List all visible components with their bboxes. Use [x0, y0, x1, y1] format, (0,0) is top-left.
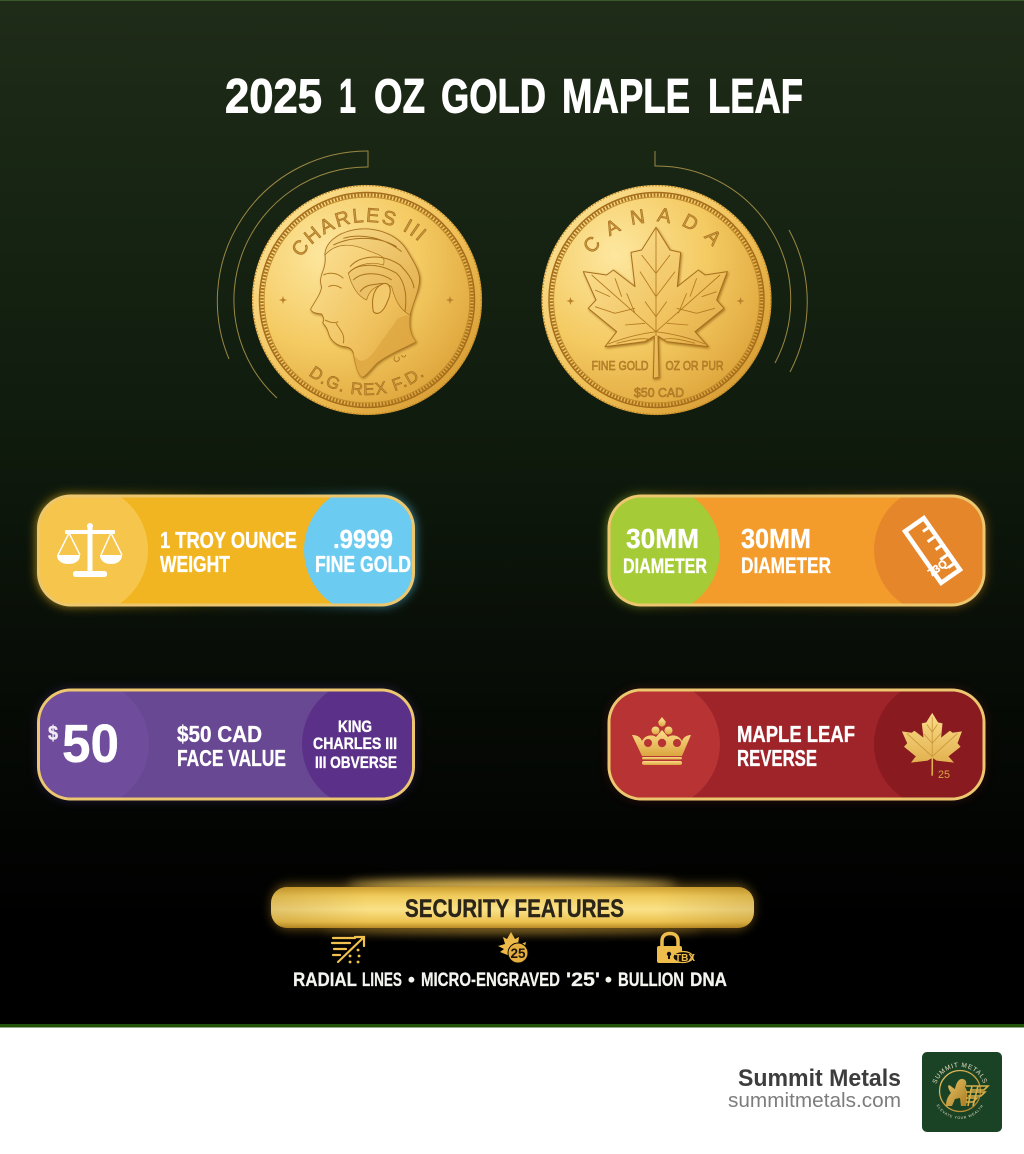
stars [566, 297, 744, 305]
brand name: Summit Metals [738, 1065, 901, 1092]
label: 30mm diameter: 30MM [741, 523, 811, 554]
maple leaf [583, 227, 727, 378]
badge: king charles iii obverse: III OBVERSE [315, 753, 397, 772]
portrait [311, 229, 419, 377]
footer [0, 1024, 1024, 1132]
website: summitmetals.com [728, 1090, 901, 1112]
security features list: DNA [690, 969, 727, 991]
legend: OZ OR PUR: OZ OR PUR [666, 358, 724, 373]
pill: weight [18, 485, 434, 615]
pill: face value [32, 684, 420, 806]
label: maple leaf reverse: MAPLE LEAF [737, 721, 855, 747]
badge: 30mm diameter: 30MM [626, 523, 699, 554]
coin: reverse Maple Leaf [541, 184, 772, 416]
legend: D.G. REX F.D.: D.G. REX F.D. [309, 366, 424, 396]
title [225, 70, 803, 124]
title: MAPLE [562, 70, 690, 124]
security features banner: SECURITY FEATURES [405, 895, 624, 923]
logo: SUMMIT METALS [932, 1062, 988, 1084]
legend: CHARLES III: CHARLES III [292, 208, 427, 255]
icon: $50 numeral: 50 [62, 714, 119, 774]
label: maple leaf reverse [737, 721, 855, 771]
label: 30mm diameter [741, 523, 831, 578]
label: $50 cad face value: $50 CAD [177, 721, 262, 747]
badge: 30mm diameter [623, 523, 707, 578]
icon: $50 numeral: $ [48, 723, 58, 745]
label: $50 cad face value: FACE VALUE [177, 745, 286, 771]
pill: maple leaf reverse [604, 684, 990, 804]
pill: diameter [590, 485, 1004, 615]
legend: $50 CAD: $50 CAD [634, 385, 684, 400]
title: OZ [374, 70, 425, 124]
label: maple leaf reverse: REVERSE [737, 745, 817, 771]
icon: ruler: 73Q [926, 558, 950, 580]
security features banner [271, 880, 754, 933]
logo [922, 1052, 1002, 1132]
title: 1 [339, 70, 356, 124]
icon: radial lines [332, 937, 364, 962]
label: $50 cad face value [177, 721, 286, 771]
icon: padlock DNA: TBX [675, 953, 695, 964]
security features list: RADIAL [293, 969, 357, 991]
security features list: • [605, 969, 612, 991]
security features list: '25' [566, 969, 600, 991]
security features list [293, 969, 727, 991]
badge: 30mm diameter: DIAMETER [623, 555, 707, 578]
icon: ruler [901, 518, 960, 586]
badge: king charles iii obverse: CHARLES III [313, 734, 397, 753]
stars [279, 296, 454, 304]
label: 1 troy ounce weight [160, 527, 297, 577]
badge: .9999 fine gold: FINE GOLD [315, 551, 411, 577]
badge: king charles iii obverse: KING [338, 717, 372, 736]
security features list: MICRO-ENGRAVED [421, 969, 560, 991]
title: 2025 [225, 70, 322, 124]
icon: maple leaf with 25: 25 [510, 945, 526, 961]
badge: .9999 fine gold [315, 524, 411, 577]
title: LEAF [708, 70, 803, 124]
label: 30mm diameter: DIAMETER [741, 553, 831, 578]
legend: CANADA: CANADA [584, 208, 720, 252]
security features list: BULLION [618, 969, 684, 991]
small 25: 25 [938, 769, 950, 781]
decorative arcs: reverse coin [655, 151, 807, 372]
decorative arcs: obverse coin [217, 151, 368, 398]
badge: king charles iii obverse [313, 717, 397, 772]
label: 1 troy ounce weight: WEIGHT [160, 551, 230, 577]
security features list: LINES [362, 969, 402, 991]
title: GOLD [441, 70, 546, 124]
icon: crown [632, 717, 691, 765]
badge: .9999 fine gold: .9999 [333, 524, 393, 554]
legend: FINE GOLD: FINE GOLD [592, 358, 648, 373]
icon: padlock DNA [657, 934, 695, 964]
security features list: • [408, 969, 415, 991]
logo: ELEVATE YOUR WEALTH [936, 1104, 983, 1119]
icon: gold maple leaf [902, 713, 962, 776]
label: 1 troy ounce weight: 1 TROY OUNCE [160, 527, 297, 553]
icon: maple leaf with 25 [498, 932, 528, 963]
icon: balance scale [57, 523, 122, 577]
coin: obverse King Charles III [252, 184, 482, 416]
